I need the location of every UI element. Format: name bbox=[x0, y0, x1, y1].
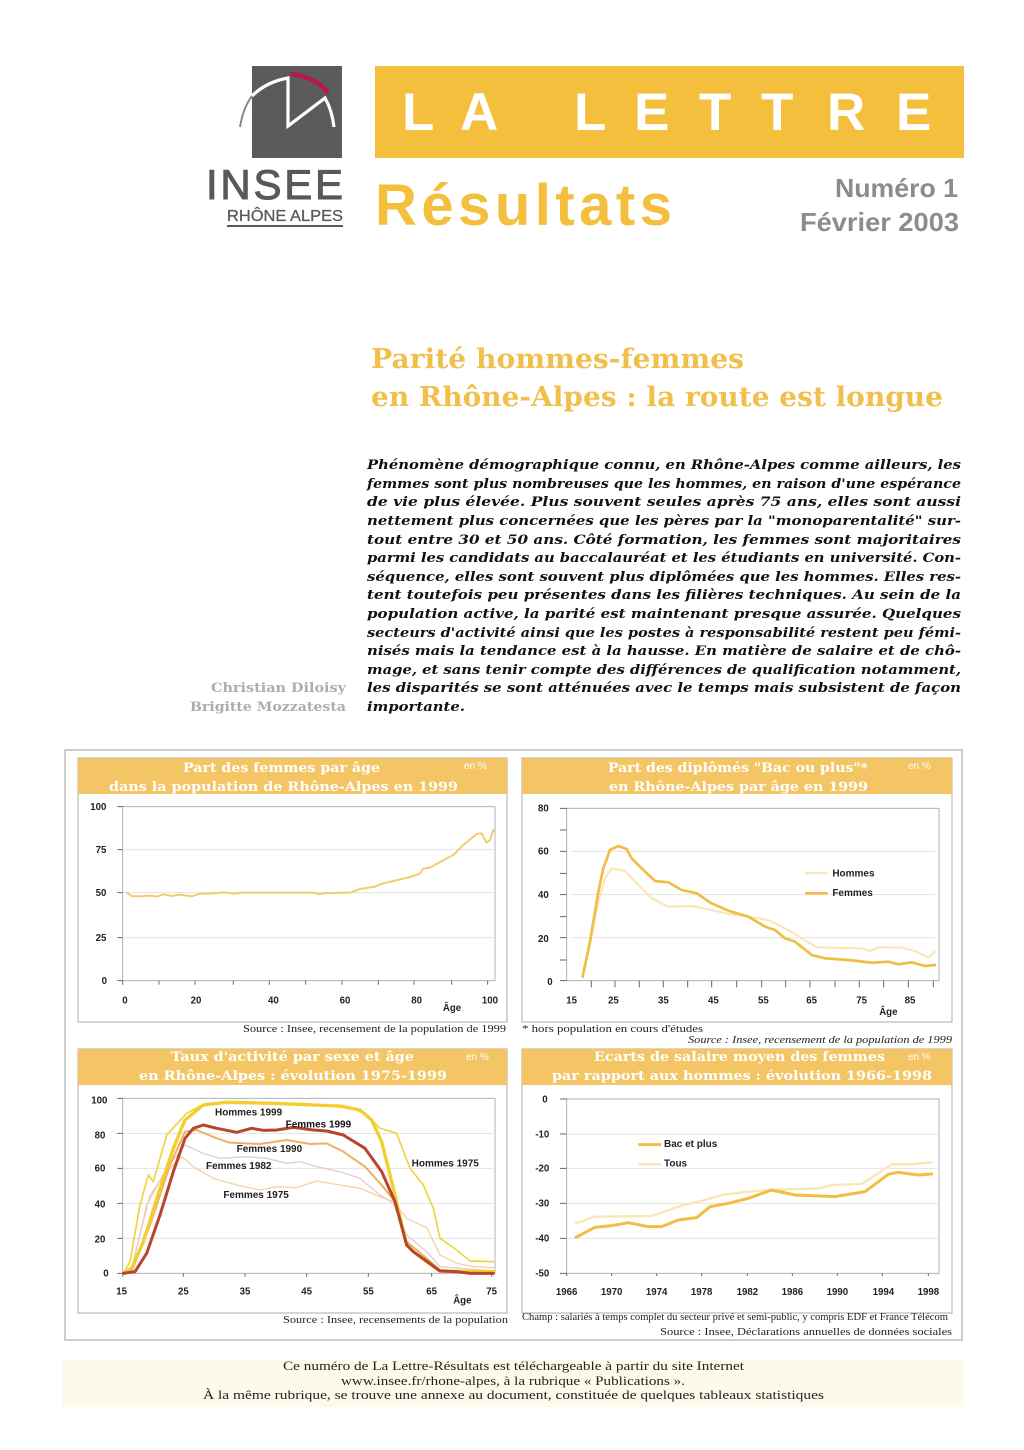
article summary text: Phénomène démographique connu, en Rhône-Alpes comme ailleurs, les bbox=[366, 458, 962, 473]
line chart: 100 bbox=[91, 1096, 107, 1107]
line chart bbox=[535, 1094, 940, 1298]
chart title bbox=[608, 761, 868, 795]
unit label: en % bbox=[464, 761, 487, 772]
series: all employees bbox=[576, 1162, 932, 1223]
series: men bbox=[583, 868, 935, 977]
issue number and date bbox=[800, 173, 959, 237]
line chart: 1978 bbox=[691, 1287, 713, 1298]
line chart: -10 bbox=[535, 1129, 549, 1140]
article title: en Rhône-Alpes : la route est longue bbox=[371, 382, 943, 413]
line chart: 0 bbox=[542, 1094, 548, 1105]
bottom information box: À la même rubrique, se trouve une annexe au document, constituée de quelques tableaux statistiques bbox=[203, 1387, 824, 1402]
line chart: 0 bbox=[547, 977, 553, 988]
unit label: en % bbox=[908, 1052, 931, 1063]
article summary text: nettement plus concernées que les pères par la "monoparentalité" sur- bbox=[367, 514, 961, 529]
line chart: 20 bbox=[95, 1235, 105, 1246]
line chart: 20 bbox=[538, 934, 549, 945]
line chart: 80 bbox=[411, 995, 422, 1006]
line chart: 55 bbox=[363, 1286, 374, 1297]
article summary text: les disparités se sont atténuées avec le temps mais subsistent de façon bbox=[367, 681, 961, 696]
line chart: -20 bbox=[535, 1164, 549, 1175]
line chart: 15 bbox=[566, 995, 578, 1006]
line chart: 85 bbox=[905, 995, 916, 1006]
logo Rhône Alpes wordmark: RHÔNE ALPES bbox=[227, 206, 343, 225]
series labels bbox=[206, 1108, 479, 1201]
article summary text: tout entre 30 et 50 ans. Côté formation, les femmes sont majoritaires bbox=[367, 533, 962, 548]
legend bbox=[638, 1139, 718, 1169]
article summary text: séquence, elles sont souvent plus diplômées que les hommes. Elles res- bbox=[367, 570, 961, 585]
chart title: Taux d'activité par sexe et âge bbox=[171, 1050, 414, 1065]
chart title bbox=[139, 1050, 447, 1084]
series labels: Femmes 1999 bbox=[286, 1119, 352, 1130]
line chart: 35 bbox=[658, 995, 669, 1006]
logo: INSEE Rhône-Alpes bbox=[206, 66, 343, 227]
line chart: 1990 bbox=[827, 1287, 848, 1298]
line chart: 40 bbox=[268, 995, 279, 1006]
footnote: Champ : salariés à temps complet du secteur privé et semi-public, y compris EDF et France Télécom bbox=[522, 1312, 948, 1323]
line chart: -40 bbox=[535, 1234, 549, 1245]
article summary text: femmes sont plus nombreuses que les hommes, en raison d'une espérance bbox=[366, 477, 961, 492]
line chart: 1982 bbox=[737, 1287, 758, 1298]
article title: Parité hommes-femmes bbox=[371, 344, 744, 375]
bottom information box bbox=[62, 1358, 964, 1407]
series labels: Hommes 1999 bbox=[215, 1108, 283, 1119]
line chart: 20 bbox=[191, 995, 201, 1006]
legend: Bac et plus bbox=[664, 1139, 718, 1150]
line chart: 0 bbox=[122, 995, 128, 1006]
panel: share of women by age bbox=[78, 758, 507, 1035]
unit label: en % bbox=[908, 761, 931, 772]
series: women 1982 bbox=[132, 1145, 493, 1271]
line chart: 25 bbox=[178, 1286, 189, 1297]
source note: Source : Insee, recensement de la population de 1999 bbox=[243, 1024, 506, 1035]
charts outer frame bbox=[65, 750, 962, 1340]
bottom information box: www.insee.fr/rhone-alpes, à la rubrique « Publications ». bbox=[341, 1373, 685, 1388]
logo square bbox=[252, 66, 342, 158]
line chart: 0 bbox=[103, 1269, 109, 1280]
chart title: dans la population de Rhône-Alpes en 1999 bbox=[109, 780, 458, 795]
banner: La Lettre: LALETTRE bbox=[402, 83, 931, 142]
legend: Femmes bbox=[832, 888, 873, 899]
series labels: Femmes 1982 bbox=[206, 1161, 272, 1172]
chart title bbox=[552, 1050, 932, 1084]
series labels: Femmes 1990 bbox=[237, 1144, 303, 1155]
line chart: 75 bbox=[856, 995, 868, 1006]
series: women 1975 bbox=[132, 1157, 493, 1268]
line chart: Âge bbox=[453, 1294, 472, 1306]
chart title: Ecarts de salaire moyen des femmes bbox=[594, 1050, 885, 1065]
line chart: 80 bbox=[538, 804, 549, 815]
line chart: 45 bbox=[301, 1286, 313, 1297]
line chart: 25 bbox=[608, 995, 619, 1006]
line chart: 65 bbox=[426, 1286, 438, 1297]
line chart: Âge bbox=[879, 1006, 898, 1018]
banner: La Lettre bbox=[375, 66, 964, 158]
chart title: Part des femmes par âge bbox=[183, 761, 380, 776]
legend: Tous bbox=[664, 1158, 688, 1169]
logo red arc bbox=[291, 74, 328, 93]
source note: Source : Insee, Déclarations annuelles de données sociales bbox=[660, 1327, 952, 1338]
legend bbox=[805, 868, 875, 899]
footnote: * hors population en cours d'études bbox=[522, 1024, 703, 1035]
article summary text: de vie plus élevée. Plus souvent seules après 75 ans, elles sont aussi bbox=[367, 495, 961, 510]
line chart bbox=[91, 1096, 498, 1306]
legend: Hommes bbox=[832, 868, 875, 879]
line chart: 75 bbox=[96, 845, 107, 856]
chart title: en Rhône-Alpes par âge en 1999 bbox=[609, 780, 868, 795]
chart title: Part des diplômés "Bac ou plus"* bbox=[608, 761, 868, 776]
authors: Christian Diloisy bbox=[211, 681, 346, 696]
logo white arc and M mark bbox=[252, 78, 334, 127]
article summary text bbox=[366, 458, 962, 715]
series: women 1999 bbox=[123, 1125, 493, 1273]
authors: Brigitte Mozzatesta bbox=[190, 700, 347, 715]
line chart: -50 bbox=[535, 1269, 549, 1280]
line chart: 100 bbox=[90, 802, 106, 813]
line chart: 35 bbox=[240, 1286, 251, 1297]
article summary text: importante. bbox=[367, 700, 465, 715]
line chart: 55 bbox=[758, 995, 769, 1006]
line chart: 65 bbox=[806, 995, 818, 1006]
heading: Résultats: Résultats bbox=[375, 173, 672, 238]
line chart: 1974 bbox=[646, 1287, 668, 1298]
series: men 1975 bbox=[123, 1102, 493, 1273]
line chart: 60 bbox=[340, 995, 350, 1006]
unit label: en % bbox=[466, 1052, 489, 1063]
line chart: 1998 bbox=[918, 1287, 940, 1298]
issue number and date: Numéro 1 bbox=[835, 173, 958, 203]
line chart: 40 bbox=[95, 1200, 105, 1211]
panel: wage gap bbox=[522, 1049, 952, 1338]
logo grey arc outside square bbox=[240, 96, 252, 127]
article summary text: population active, la parité est maintenant presque assurée. Quelques bbox=[367, 607, 962, 622]
article summary text: secteurs d'activité ainsi que les postes à responsabilité restent peu fémi- bbox=[367, 626, 961, 641]
series: women 1990 bbox=[132, 1130, 493, 1272]
line chart: 60 bbox=[95, 1164, 105, 1175]
panel: activity rate bbox=[78, 1049, 509, 1326]
issue number and date: Février 2003 bbox=[800, 207, 959, 237]
chart title: en Rhône-Alpes : évolution 1975-1999 bbox=[139, 1069, 447, 1084]
line chart: 1970 bbox=[601, 1287, 622, 1298]
series: men 1999 bbox=[123, 1102, 493, 1273]
line chart bbox=[90, 802, 498, 1014]
line chart: Âge bbox=[443, 1002, 462, 1014]
chart title bbox=[109, 761, 458, 795]
panel: graduates by age bbox=[522, 758, 953, 1046]
source note: Source : Insee, recensements de la population bbox=[283, 1315, 509, 1326]
line chart: 1966 bbox=[556, 1287, 578, 1298]
line chart: 25 bbox=[96, 933, 107, 944]
line chart: 80 bbox=[95, 1131, 105, 1142]
authors bbox=[190, 681, 347, 715]
line chart: 45 bbox=[708, 995, 719, 1006]
logo INSEE wordmark: INSEE bbox=[206, 161, 343, 208]
chart title: par rapport aux hommes : évolution 1966-1998 bbox=[552, 1069, 932, 1084]
line chart: 15 bbox=[116, 1286, 128, 1297]
line chart: 60 bbox=[538, 847, 549, 858]
bottom information box: Ce numéro de La Lettre-Résultats est téléchargeable à partir du site Internet bbox=[283, 1358, 744, 1373]
line chart: 0 bbox=[102, 976, 107, 987]
article summary text: tent toutefois peu présentes dans les filières techniques. Au sein de la bbox=[367, 588, 961, 603]
article title bbox=[371, 344, 943, 413]
line chart: 1994 bbox=[873, 1287, 895, 1298]
line chart: 75 bbox=[486, 1286, 498, 1297]
series labels: Femmes 1975 bbox=[223, 1190, 289, 1201]
line chart: -30 bbox=[535, 1199, 549, 1210]
line chart: 1986 bbox=[782, 1287, 804, 1298]
line chart: 100 bbox=[482, 995, 498, 1006]
article summary text: parmi les candidats au baccalauréat et les étudiants en université. Con- bbox=[367, 551, 961, 566]
article summary text: nisés mais la tendance est à la hausse. En matière de salaire et de chô- bbox=[367, 644, 961, 659]
line chart bbox=[538, 804, 939, 1018]
line chart: 50 bbox=[96, 888, 106, 899]
source note: Source : Insee, recensement de la population de 1999 bbox=[688, 1035, 953, 1046]
series: graduates bbox=[576, 1172, 932, 1237]
series: women bbox=[583, 846, 935, 977]
line chart: 40 bbox=[538, 890, 549, 901]
article summary text: mage, et sans tenir compte des différences de qualification notamment, bbox=[367, 663, 961, 678]
series labels: Hommes 1975 bbox=[412, 1159, 479, 1170]
